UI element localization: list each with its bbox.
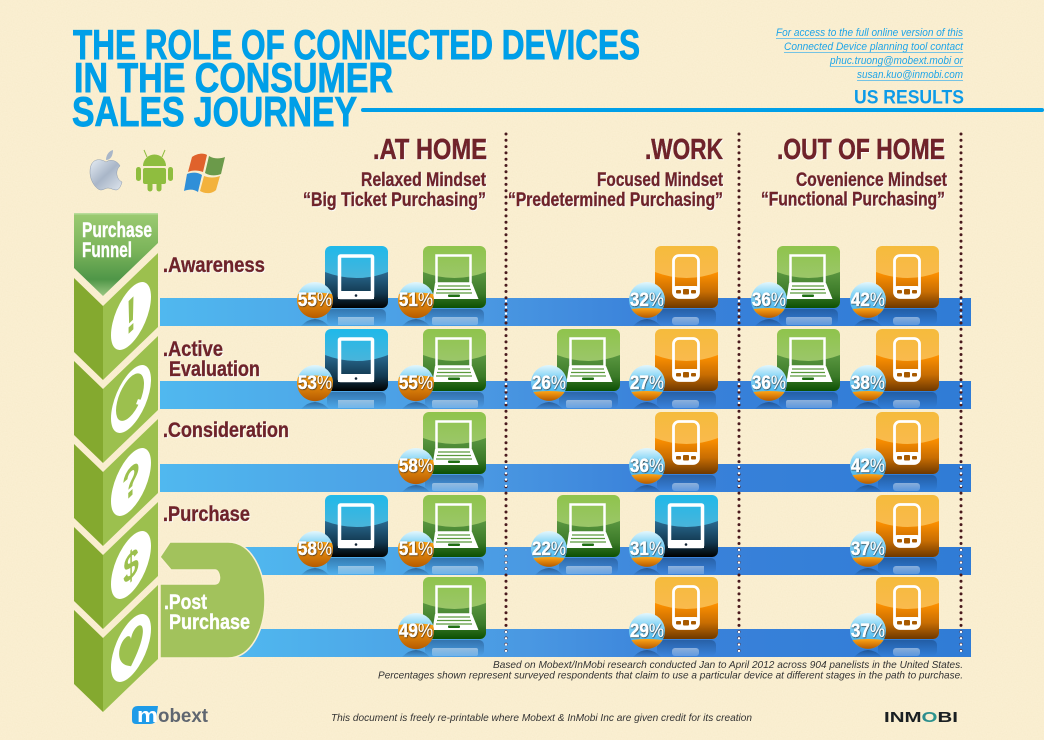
os icons: [90, 150, 225, 193]
row: post purchase devices: [398, 577, 939, 657]
laptop 51%: [398, 495, 486, 575]
heading: at home: Relaxed Mindset: [361, 170, 487, 191]
row: awareness devices: [297, 246, 939, 326]
row: consideration devices: [398, 412, 939, 492]
stage label: purchase: .Purchase: [163, 503, 250, 526]
laptop 36%: [751, 246, 840, 326]
phone 38%: 38%: [851, 372, 885, 393]
funnel step: awareness: !: [125, 284, 137, 348]
funnel header: [74, 213, 158, 296]
us results heading: US RESULTS: [854, 86, 964, 108]
laptop 49%: [398, 577, 486, 657]
stage label: active evaluation: .Active: [163, 338, 223, 361]
contact note: For access to the full online version of this: [776, 27, 963, 39]
funnel step: active evaluation: [74, 336, 158, 463]
icon: windows: [184, 154, 225, 193]
tablet 55%: 55%: [298, 289, 332, 310]
logo: mobext: m: [137, 705, 158, 727]
funnel step: purchase: [74, 502, 158, 629]
phone 42%: 42%: [851, 289, 885, 310]
tablet 58%: [297, 495, 388, 575]
row: purchase devices: [297, 495, 939, 575]
stage label: consideration: .Consideration: [163, 419, 289, 442]
title: IN THE CONSUMER: [74, 54, 393, 101]
tablet 58%: 58%: [298, 538, 332, 559]
research note: Percentages shown represent surveyed respondents that claim to use a particular device at different stages in the path to purchase.: [378, 670, 963, 682]
funnel step: post purchase: [74, 585, 158, 712]
laptop 26%: 26%: [532, 372, 566, 393]
laptop 36%: [751, 329, 840, 409]
title: [72, 21, 640, 135]
heading: work: .WORK: [645, 134, 723, 166]
research note: Based on Mobext/InMobi research conducted Jan to April 2012 across 904 panelists in the United States.: [493, 659, 963, 671]
laptop 51%: 51%: [399, 538, 433, 559]
phone 38%: [850, 329, 939, 409]
contact note: [776, 27, 964, 81]
research note: [378, 659, 963, 682]
phone 42%: [850, 412, 939, 492]
funnel header: Purchase: [82, 219, 152, 242]
heading: at home: [303, 134, 487, 211]
phone 29%: 29%: [630, 620, 664, 641]
laptop 55%: [398, 329, 486, 409]
laptop 36%: 36%: [752, 372, 786, 393]
icon: apple: [90, 150, 122, 190]
phone 36%: 36%: [630, 455, 664, 476]
tablet 53%: 53%: [298, 372, 332, 393]
stage label: awareness: .Awareness: [163, 254, 265, 277]
phone 32%: 32%: [630, 289, 664, 310]
stage label: active evaluation: Evaluation: [169, 358, 260, 381]
title rule: [361, 108, 1044, 112]
heading: work: Focused Mindset: [597, 170, 724, 191]
purchase funnel: [74, 213, 158, 712]
phone 27%: 27%: [630, 372, 664, 393]
funnel step: consideration: [74, 419, 158, 546]
laptop 58%: 58%: [399, 455, 433, 476]
heading: work: [508, 134, 724, 211]
heading: out of home: “Functional Purchasing”: [761, 190, 945, 210]
post purchase tab: Purchase: [169, 611, 250, 634]
laptop 55%: 55%: [399, 372, 433, 393]
contact note: Connected Device planning tool contact: [784, 41, 964, 53]
phone 37%: 37%: [851, 538, 885, 559]
heading: out of home: Covenience Mindset: [796, 170, 948, 191]
laptop 22%: 22%: [532, 538, 566, 559]
laptop 58%: [398, 412, 486, 492]
funnel header: Funnel: [82, 239, 132, 262]
post purchase tab: [160, 542, 265, 658]
heading: work: “Predetermined Purchasing”: [508, 190, 723, 211]
phone 36%: [629, 412, 718, 492]
icon: android: [136, 150, 173, 192]
tablet 53%: [297, 329, 388, 409]
heading: out of home: .OUT OF HOME: [777, 134, 945, 166]
logo: mobext: obext: [158, 706, 209, 727]
title: SALES JOURNEY: [72, 88, 357, 135]
post purchase tab: .Post: [164, 591, 207, 614]
phone 42%: [850, 246, 939, 326]
stage bars: [160, 298, 971, 657]
laptop 22%: [531, 495, 620, 575]
tablet 31%: 31%: [630, 538, 664, 559]
phone 37%: [850, 577, 939, 657]
tablet 55%: [297, 246, 388, 326]
funnel step: consideration: ?: [122, 449, 140, 514]
title: THE ROLE OF CONNECTED DEVICES: [73, 21, 640, 68]
reprint credit: This document is freely re-printable where Mobext & InMobi Inc are given credit for its creation: [331, 712, 752, 724]
phone 27%: [629, 329, 718, 409]
laptop 36%: 36%: [752, 289, 786, 310]
row: active evaluation devices: [297, 329, 939, 409]
stage label: active evaluation: [163, 338, 260, 381]
funnel step: purchase: $: [123, 537, 139, 596]
column dividers: [506, 134, 961, 657]
laptop 26%: [531, 329, 620, 409]
heading: out of home: [761, 134, 948, 210]
phone 32%: [629, 246, 718, 326]
laptop 49%: 49%: [399, 620, 433, 641]
logo: mobext: [132, 705, 209, 727]
logo: inmobi: INM O BI: [884, 709, 958, 726]
contact note: susan.kuo@inmobi.com: [857, 69, 963, 81]
phone 42%: 42%: [851, 455, 885, 476]
laptop 51%: 51%: [399, 289, 433, 310]
heading: at home: “Big Ticket Purchasing”: [303, 190, 486, 211]
contact note: phuc.truong@mobext.mobi or: [829, 55, 964, 67]
laptop 51%: [398, 246, 486, 326]
funnel step: awareness: [74, 253, 158, 380]
phone 37%: [850, 495, 939, 575]
phone 37%: 37%: [851, 620, 885, 641]
phone 29%: [629, 577, 718, 657]
tablet 31%: [629, 495, 718, 575]
heading: at home: .AT HOME: [373, 134, 487, 166]
